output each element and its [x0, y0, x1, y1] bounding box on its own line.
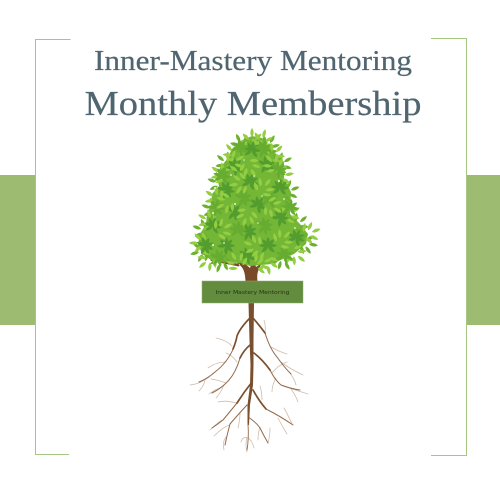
leaves: edge sprays mid: [187, 129, 320, 276]
left bracket: [36, 40, 70, 454]
right side block: [466, 175, 500, 325]
label box: [202, 281, 303, 303]
leaves: mid: [205, 135, 301, 269]
leaves: dark: [195, 140, 308, 267]
trunk: [210, 258, 262, 281]
canopy base: [198, 136, 308, 266]
main root: [248, 303, 254, 425]
white gaps between leaves: [212, 142, 296, 246]
tree: [187, 126, 324, 281]
leaves: edge sprays light: [189, 126, 324, 277]
subtitle: Monthly Membership: [84, 84, 422, 123]
label text: Inner Mastery Mentoring: [216, 290, 290, 296]
right bracket: [431, 38, 466, 456]
left side block: [0, 175, 35, 325]
leaves: light: [210, 146, 299, 276]
title: Inner-Mastery Mentoring: [94, 45, 412, 77]
roots: [190, 303, 308, 452]
